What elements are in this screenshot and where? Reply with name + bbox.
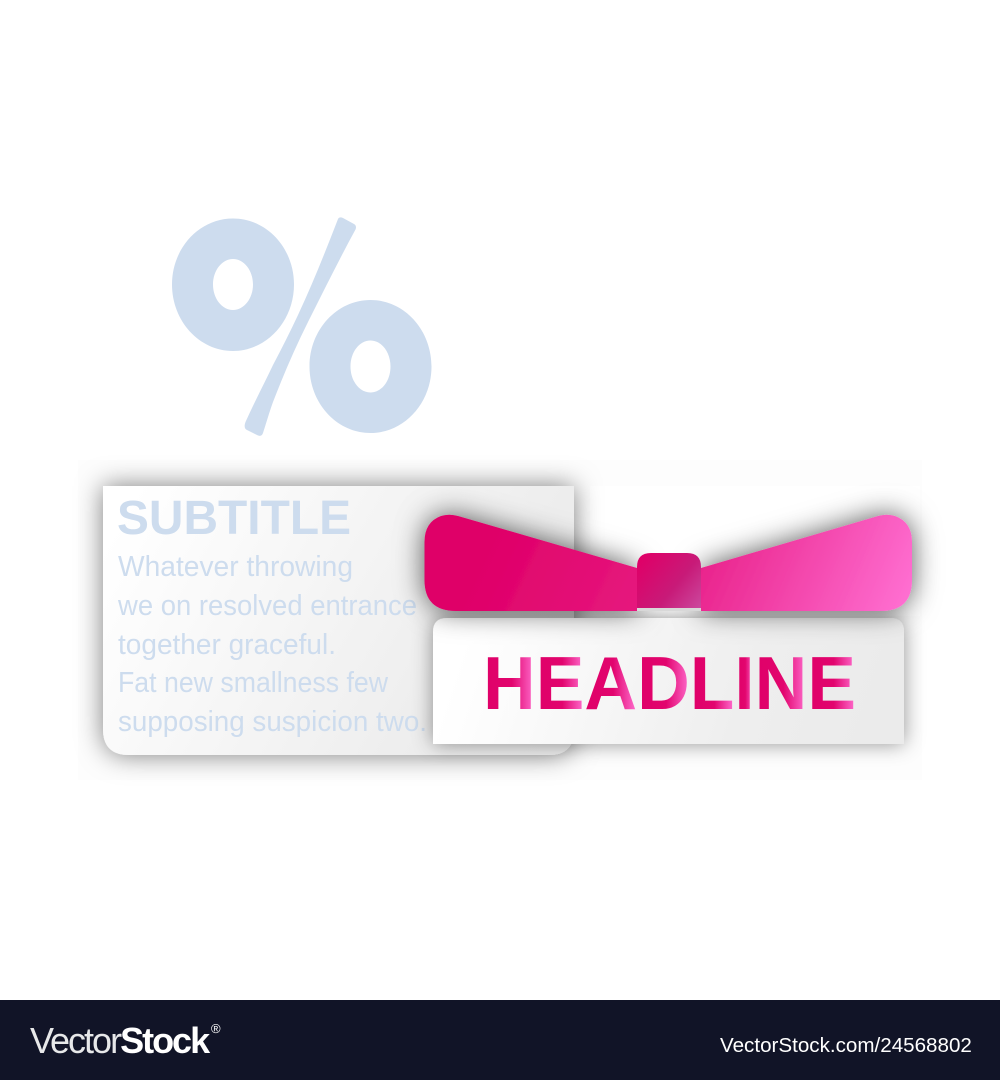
footer logo: VectorStock: [30, 1020, 208, 1061]
headline: L: [690, 641, 734, 725]
faint backdrop panel: [78, 460, 922, 780]
headline: D: [637, 641, 690, 725]
bow right wing: [701, 515, 912, 611]
footer bar: ®: [211, 1021, 221, 1036]
icon: percent sign: [172, 217, 432, 436]
subtitle: SUBTITLE: [117, 492, 351, 545]
bow left wing: [424, 515, 637, 611]
body text: [117, 551, 427, 738]
body text: Fat new smallness few: [118, 667, 388, 699]
body text: supposing suspicion two.: [118, 706, 427, 738]
headline: E: [807, 641, 856, 725]
body text: we on resolved entrance: [117, 590, 417, 622]
headline: N: [755, 641, 807, 725]
headline: A: [584, 641, 637, 725]
panel: headline card background: [433, 618, 904, 744]
headline: H: [483, 641, 536, 725]
bow knot: [637, 553, 701, 608]
headline: E: [536, 641, 584, 725]
footer bar: [0, 1000, 1000, 1080]
body text: together graceful.: [118, 629, 336, 661]
headline: [483, 641, 856, 725]
body text: Whatever throwing: [118, 551, 353, 583]
panel: subtitle card: [103, 486, 574, 755]
footer reference id: VectorStock.com/24568802: [720, 1034, 972, 1057]
card background: [103, 486, 574, 755]
headline: I: [734, 641, 755, 725]
icon: ribbon bow: [424, 515, 912, 611]
